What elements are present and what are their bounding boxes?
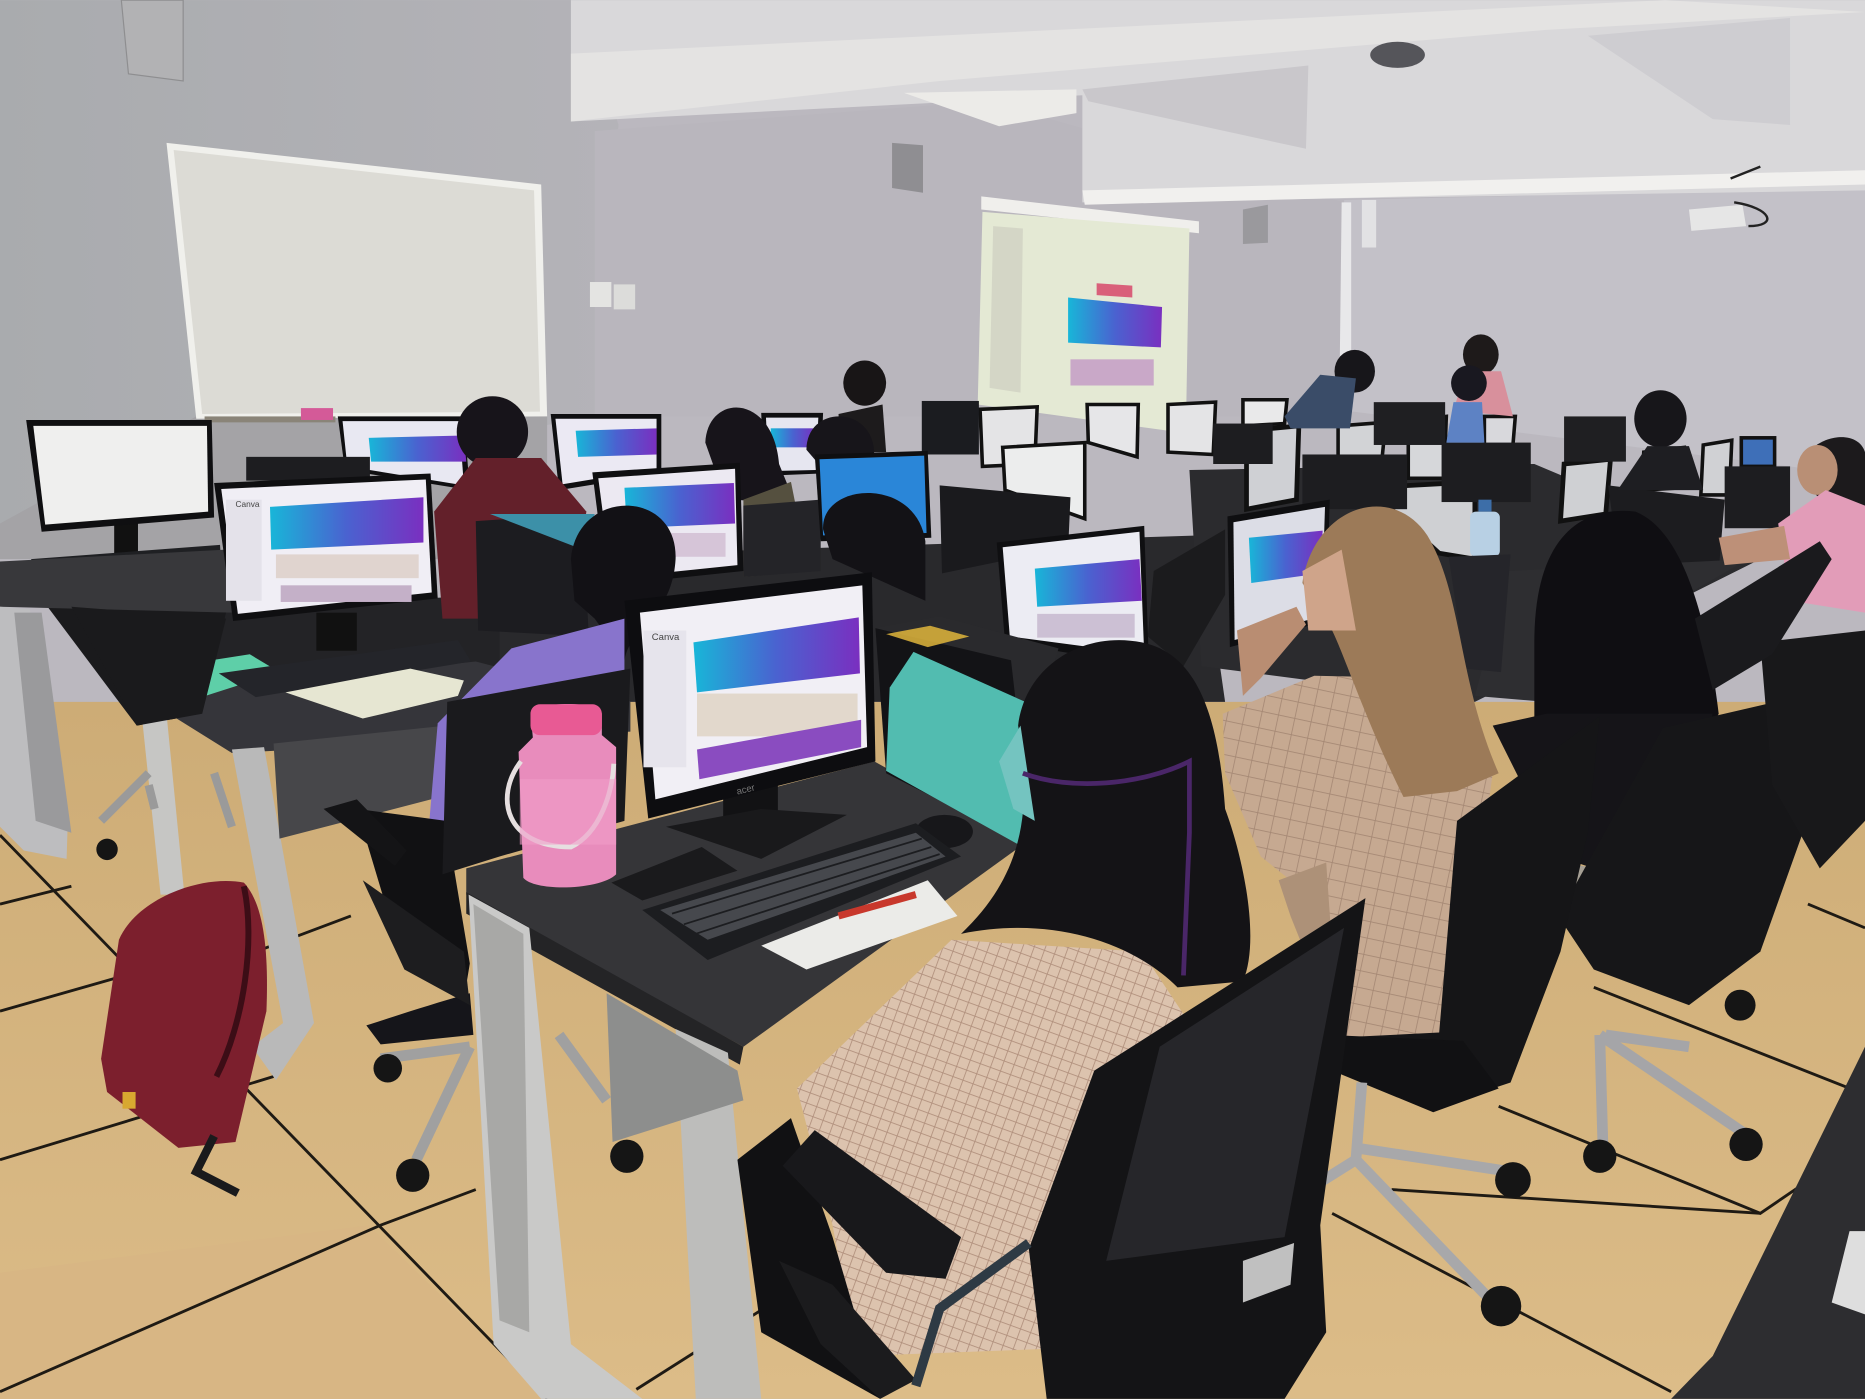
under-desk panel [607,993,743,1142]
wall speaker, centre [892,143,923,193]
red backpack [101,881,267,1193]
back row monitors [246,413,823,490]
desk leg right [676,1029,761,1399]
woman in black blouse, right [1493,511,1719,925]
paper and pen [761,880,957,969]
second row desk [127,640,630,1080]
far right desks and monitors [922,400,1790,702]
thermostat switches [590,282,635,309]
right chair [1558,541,1865,1173]
left chair [324,669,643,1192]
backpack tag [123,1092,136,1109]
tower PC with green folder [874,616,1059,847]
woman in black hijab and checked blouse [737,640,1261,1399]
water bottle on right desk [1470,500,1500,557]
projector screen [978,196,1199,433]
tower PC on right desk [1449,554,1511,672]
whiteboard marker tray [205,408,335,422]
wall speaker, left [121,0,183,81]
screen label: Canva [652,632,680,643]
right middle monitor [1148,500,1330,666]
centre front monitor [624,572,875,859]
front chair [779,898,1365,1399]
keyboard [219,640,471,697]
whiteboard [167,143,547,419]
monitor row three middle [997,526,1149,666]
open book [285,669,464,719]
instructors at the back [839,334,1703,490]
front keyboard [642,823,961,960]
left row chair under desk [71,607,232,860]
black tower PC [476,500,821,636]
monitor with blue desktop [815,451,931,601]
desk leg left [469,895,642,1399]
ceiling beams [571,0,1865,205]
left middle monitor [214,474,438,651]
middle chair [1308,716,1600,1326]
ceiling projector [1370,42,1767,231]
back row seated people [705,407,874,577]
front desk [466,761,1023,1399]
blonde woman in plaid jacket [1223,506,1499,1037]
green folder [127,654,280,710]
screen label: Canva [236,499,260,509]
wall conduit [1339,200,1376,405]
phone and mouse on front desk [611,815,973,901]
person in maroon shirt [434,396,586,619]
woman in pink shirt, right edge [1719,437,1865,613]
wall speaker, right [1243,205,1268,244]
woman in purple shirt [357,506,676,1044]
brand label: acer [736,782,756,798]
foreground desk bottom right [1671,1047,1865,1399]
dark furniture behind the rows [48,535,1225,726]
far left monitor [26,420,221,607]
monitor row two centre [592,463,743,585]
back walls [0,0,1865,738]
pink water bottle [507,704,616,887]
floor [0,702,1865,1399]
left back desk [0,550,232,859]
